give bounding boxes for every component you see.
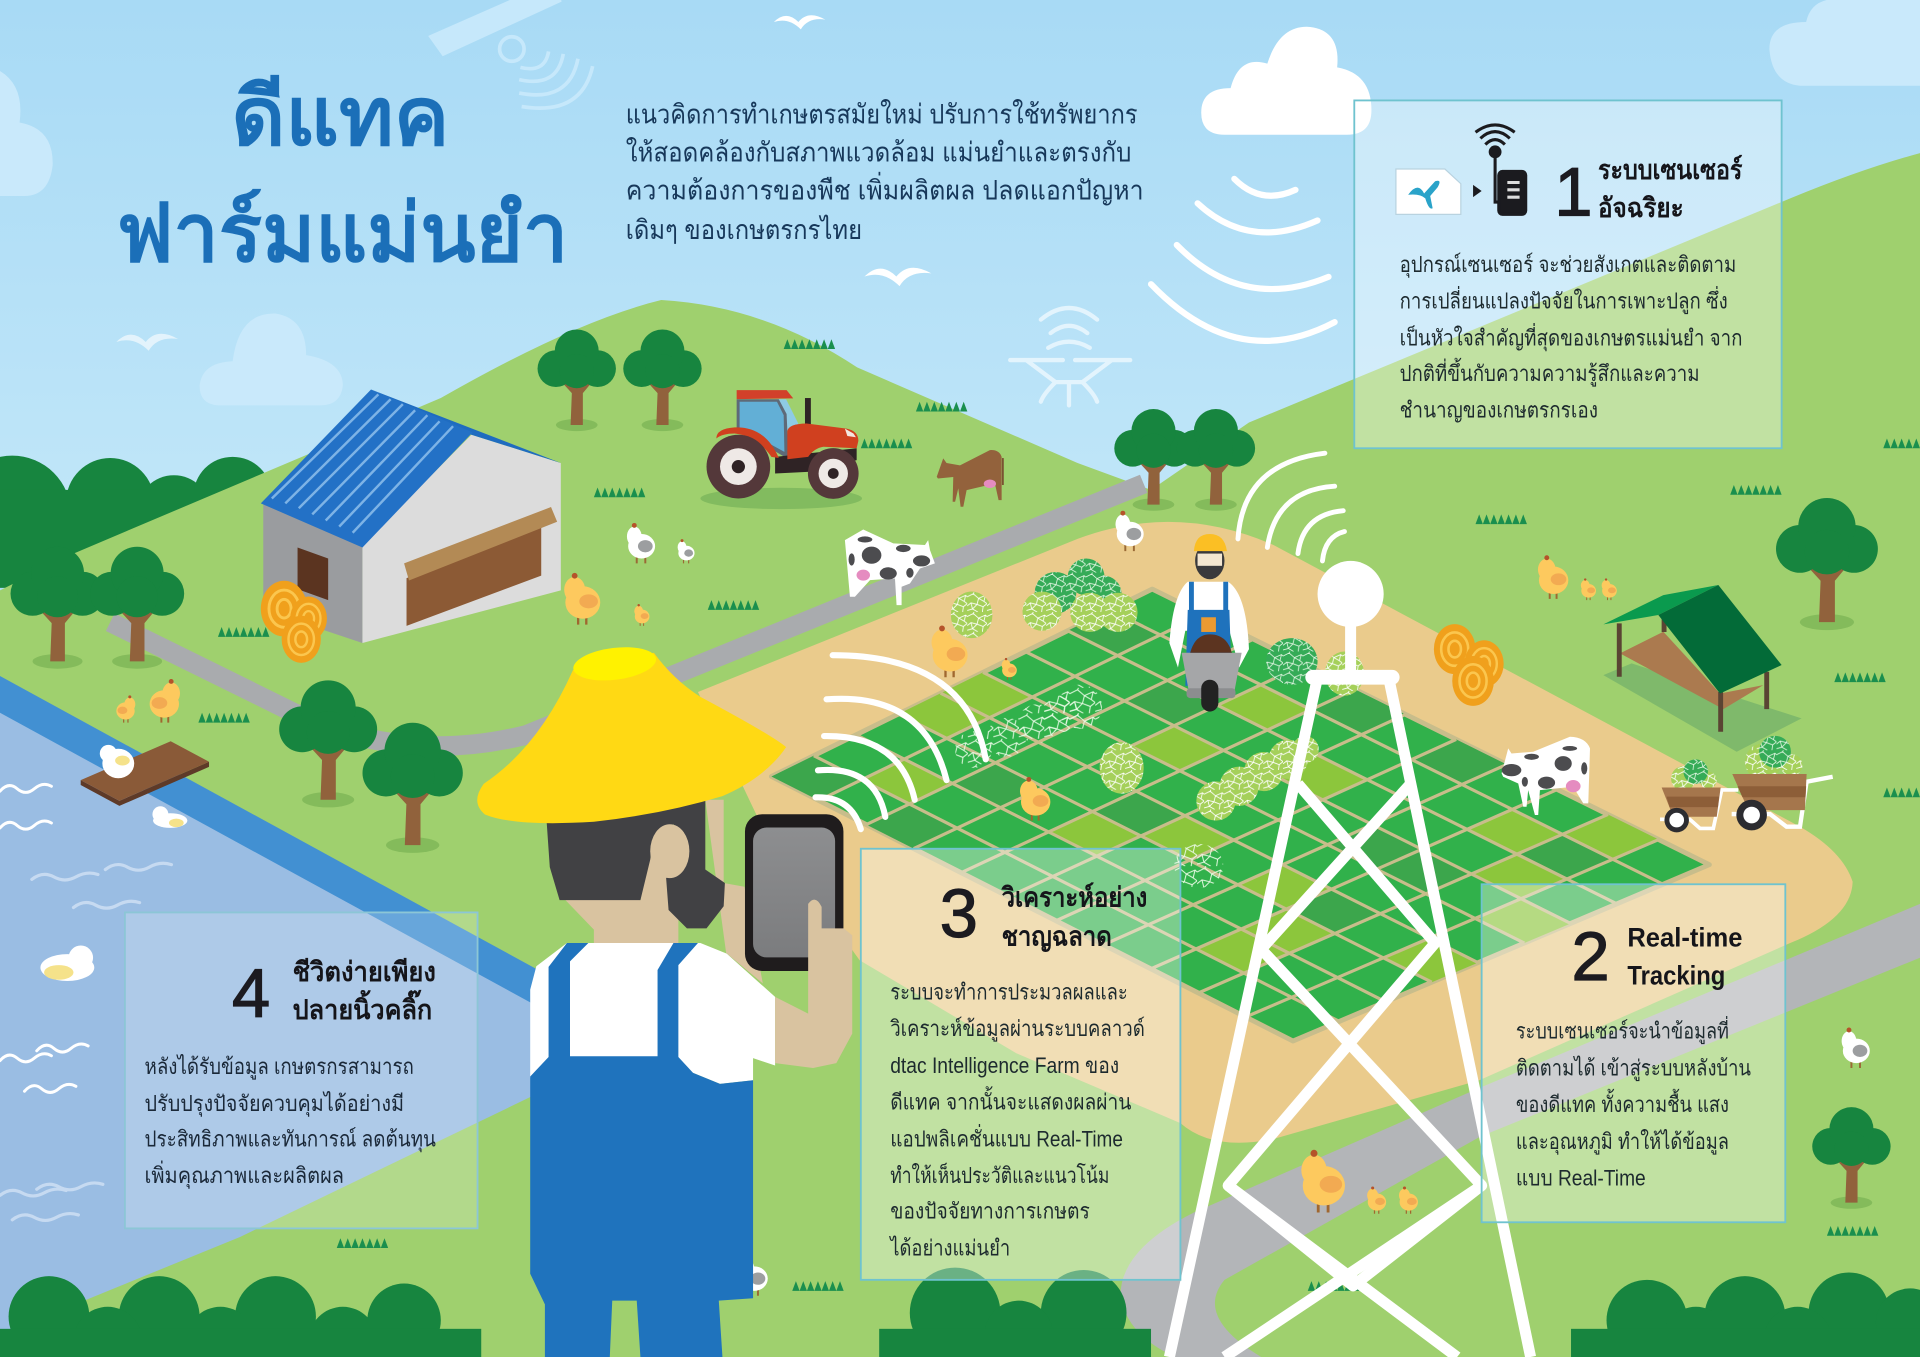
cart left — [1660, 759, 1738, 832]
icon: sensor device — [1473, 125, 1526, 214]
heading: อัจฉริยะ — [1598, 193, 1684, 223]
body text: และอุณหภูมิ ทำให้ได้ข้อมูล — [1516, 1129, 1729, 1155]
body text: ของปัจจัยทางการเกษตร — [890, 1199, 1090, 1224]
darker cells — [771, 610, 1613, 933]
body text: ชำนาญของเกษตรกรเอง — [1400, 398, 1598, 423]
barn — [261, 389, 561, 643]
sky signal arcs — [1151, 179, 1335, 341]
body text: แบบ Real-Time — [1516, 1166, 1646, 1191]
icon: SIM card — [1396, 169, 1461, 214]
title: ดีแทค — [231, 73, 449, 163]
heading: Tracking — [1627, 961, 1725, 991]
spotted cow — [845, 529, 935, 605]
body text: ระบบเซนเซอร์จะนำข้อมูลที่ — [1516, 1016, 1729, 1045]
body text: ทำให้เห็นประวัติและแนวโน้ม — [890, 1161, 1109, 1188]
left forest — [0, 456, 272, 588]
body text — [144, 1054, 436, 1189]
ducks — [40, 806, 187, 981]
panel 4: simple life — [125, 912, 478, 1228]
intro text: ให้สอดคล้องกับสภาพแวดล้อม แม่นยำและตรงกับ — [626, 137, 1131, 168]
icon: satellite — [431, 0, 593, 108]
farmer with wheelbarrow — [1169, 534, 1249, 712]
title — [116, 73, 568, 279]
intro text — [626, 99, 1144, 245]
water — [0, 676, 545, 1335]
overalls — [530, 943, 753, 1357]
hat crown — [571, 643, 658, 685]
number 3: 3 — [940, 875, 978, 952]
panel 3: smart analysis — [861, 849, 1180, 1280]
body text: ได้อย่างแม่นยำ — [889, 1235, 1010, 1260]
grass tufts — [198, 339, 1920, 1291]
body text: ดีแทค จากนั้นจะแสดงผลผ่าน — [890, 1087, 1131, 1115]
hut — [1603, 585, 1802, 752]
number 2: 2 — [1572, 918, 1610, 995]
title: ฟาร์มแม่นยำ — [116, 189, 568, 279]
body text: วิเคราะห์ข้อมูลผ่านระบบคลาวด์ — [890, 1016, 1145, 1042]
lower road — [1120, 904, 1920, 1357]
farmer with phone — [477, 643, 852, 1357]
body text: เพิ่มคุณภาพและผลิตผล — [144, 1160, 344, 1189]
birds — [116, 15, 931, 351]
hair — [547, 800, 725, 928]
heading: ระบบเซนเซอร์ — [1598, 155, 1743, 185]
body text: หลังได้รับข้อมูล เกษตรกรสามารถ — [144, 1054, 414, 1080]
body text: อุปกรณ์เซนเซอร์ จะช่วยสังเกตและติดตาม — [1400, 252, 1736, 278]
intro text: ความต้องการของพืช เพิ่มผลิตผล ปลดแอกปัญหา — [626, 172, 1144, 206]
intro text: แนวคิดการทำเกษตรสมัยใหม่ ปรับการใช้ทรัพยากร — [626, 99, 1138, 130]
heading — [1001, 882, 1147, 952]
body text: ระบบจะทำการประมวลผลและ — [890, 979, 1128, 1004]
hand and finger — [775, 900, 852, 1068]
body text: ปกติที่ขึ้นกับความความรู้สึกและความ — [1400, 358, 1700, 387]
body text: ประสิทธิภาพและทันการณ์ ลดต้นทุน — [144, 1126, 436, 1152]
heading: ชีวิตง่ายเพียง — [293, 957, 436, 987]
number 4: 4 — [232, 955, 270, 1032]
tower — [1169, 561, 1531, 1357]
heading — [1598, 155, 1743, 223]
bales near barn — [261, 581, 327, 663]
heading: ชาญฉลาด — [1002, 921, 1112, 952]
trees — [11, 329, 1891, 1209]
neck and face — [560, 857, 678, 945]
tower signal arcs — [1238, 453, 1344, 561]
ear — [650, 824, 689, 878]
phone — [745, 814, 843, 971]
grid lines — [814, 610, 1663, 1021]
spotted cow right — [1502, 737, 1590, 815]
panel 2: real-time tracking — [1482, 884, 1785, 1222]
waves — [0, 784, 171, 1220]
sand yard — [698, 522, 1853, 1143]
intro text: เดิมๆ ของเกษตรกรไทย — [626, 215, 862, 245]
dock with duck — [81, 741, 209, 806]
body text: dtac Intelligence Farm ของ — [890, 1053, 1119, 1078]
body text — [889, 979, 1145, 1260]
body text: ติดตามได้ เข้าสู่ระบบหลังบ้าน — [1516, 1055, 1751, 1081]
heading: ปลายนิ้วคลิ๊ก — [293, 989, 432, 1025]
clouds — [0, 0, 1920, 405]
hens and chicks — [116, 511, 1870, 1296]
body text: การเปลี่ยนแปลงปัจจัยในการเพาะปลูก ซึ่ง — [1400, 286, 1728, 315]
body text: ของดีแทค ทั้งความชื้น แสง — [1516, 1089, 1729, 1117]
shirt — [530, 943, 775, 1084]
brown cow — [937, 450, 1003, 507]
cart right — [1732, 736, 1833, 830]
sky background — [0, 0, 1920, 551]
crop field grid — [771, 589, 1709, 1041]
hat brim — [477, 653, 786, 823]
body text — [1400, 252, 1742, 423]
panel 1: smart sensor — [1354, 100, 1782, 448]
melon bushes — [951, 558, 1364, 888]
heading — [293, 957, 436, 1025]
body text: ปรับปรุงปัจจัยควบคุมได้อย่างมี — [144, 1091, 404, 1117]
icon: drone — [1010, 308, 1130, 405]
heading: Real-time — [1627, 923, 1742, 953]
body text: เป็นหัวใจสำคัญที่สุดของเกษตรแม่นยำ จาก — [1400, 322, 1742, 351]
bales right — [1434, 624, 1504, 706]
bottom trees — [0, 1268, 1920, 1357]
body text — [1516, 1016, 1751, 1191]
road — [110, 484, 1144, 746]
heading: วิเคราะห์อย่าง — [1001, 882, 1147, 912]
wrist behind phone — [705, 800, 763, 983]
body text: แอปพลิเคชั่นแบบ Real-Time — [890, 1123, 1123, 1151]
heading — [1627, 923, 1742, 991]
number 1: 1 — [1554, 154, 1593, 231]
tractor — [700, 390, 862, 509]
lime cells — [862, 672, 1659, 982]
phone signal arcs — [816, 655, 986, 829]
